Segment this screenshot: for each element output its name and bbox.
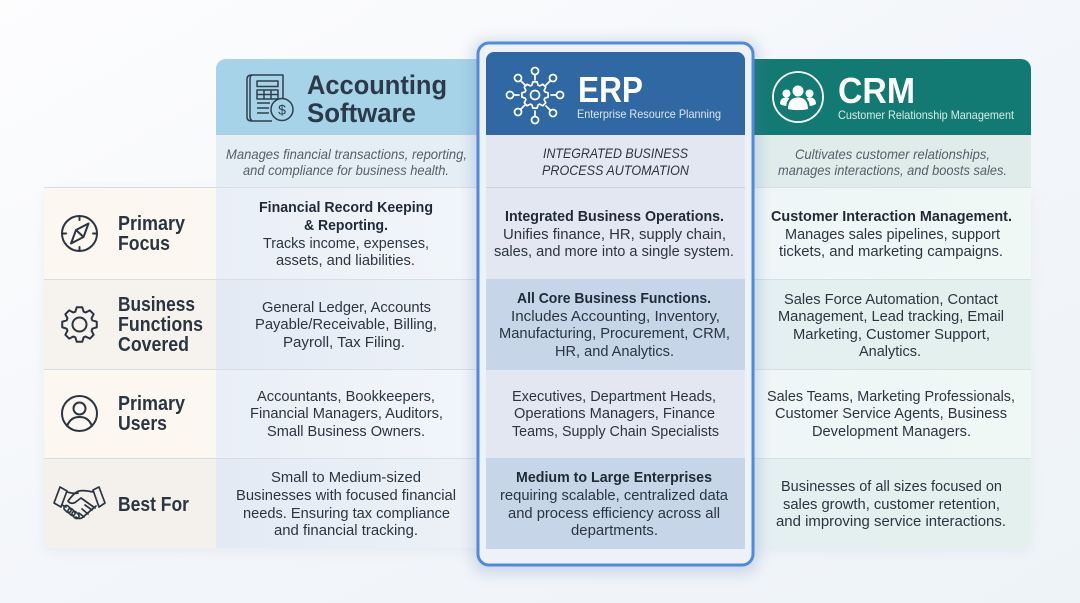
text: ERP primary users: Operations Managers, Finance	[514, 405, 715, 422]
label: Primary Focus	[118, 213, 186, 255]
text: CRM best for: sales growth, customer retention,	[783, 496, 1000, 513]
text: Accounting best for: needs. Ensuring tax compliance	[243, 505, 450, 522]
title: CRM: CRM	[838, 70, 915, 111]
icon: ledger with dollar	[247, 75, 293, 121]
title: ERP: ERP	[578, 69, 643, 110]
label: Business Functions Covered: Covered	[118, 334, 189, 356]
text: Accounting primary focus: & Reporting.	[304, 217, 388, 234]
text: Accounting description: Manages financial transactions, reporting,	[226, 146, 467, 162]
text: CRM primary focus: Manages sales pipelines, support	[785, 226, 1001, 243]
text: ERP description: PROCESS AUTOMATION	[542, 162, 690, 178]
text: Accounting primary focus	[259, 199, 433, 269]
text: CRM business functions: Marketing, Customer Support,	[793, 326, 990, 343]
subtitle: Customer Relationship Management: Customer Relationship Management	[838, 108, 1015, 122]
text: Accounting best for: and financial tracking.	[274, 522, 418, 539]
text: ERP business functions	[499, 290, 730, 360]
label: Primary Users	[118, 393, 186, 435]
text: Accounting primary users	[250, 388, 443, 440]
header: Accounting Software	[216, 59, 490, 135]
panel: row labels	[44, 187, 216, 548]
text: ERP description	[542, 145, 690, 178]
text: CRM description: Cultivates customer relationships,	[795, 146, 990, 162]
text: CRM best for	[776, 478, 1006, 530]
text: ERP best for: departments.	[571, 522, 658, 539]
text: CRM business functions: Management, Lead tracking, Email	[778, 308, 1004, 325]
text: Accounting business functions: General Ledger, Accounts	[262, 299, 431, 316]
text: Accounting primary focus: assets, and liabilities.	[276, 252, 415, 269]
subtitle: Enterprise Resource Planning: Enterprise Resource Planning	[577, 107, 721, 121]
text: Accounting business functions: Payroll, Tax Filing.	[283, 334, 405, 351]
header: Accounting Software: $	[278, 102, 286, 118]
text: ERP primary users: Executives, Department Heads,	[512, 388, 716, 405]
label: Business Functions Covered	[118, 294, 203, 356]
text: CRM description: manages interactions, and boosts sales.	[778, 162, 1007, 178]
label: Business Functions Covered: Functions	[118, 314, 203, 336]
text: ERP primary users	[512, 388, 719, 440]
text: Accounting primary users: Financial Managers, Auditors,	[250, 405, 443, 422]
title: Accounting Software: Accounting	[307, 70, 447, 100]
icon: user	[62, 396, 97, 431]
text: Accounting best for: Businesses with focused financial	[236, 487, 456, 504]
icon: compass	[62, 216, 97, 251]
header: ERP	[486, 52, 745, 135]
text: ERP best for: and process efficiency across all	[508, 505, 720, 522]
text: ERP best for: requiring scalable, centralized data	[500, 487, 729, 504]
text: Accounting description: and compliance for business health.	[243, 162, 449, 178]
label: Best For: Best For	[118, 494, 189, 516]
text: ERP primary users: Teams, Supply Chain Specialists	[512, 423, 719, 440]
label: Business Functions Covered: Business	[118, 294, 195, 316]
title: Accounting Software	[307, 70, 447, 128]
text: ERP description: INTEGRATED BUSINESS	[543, 145, 689, 161]
text: CRM best for: Businesses of all sizes focused on	[781, 478, 1002, 495]
text: CRM business functions	[778, 291, 1004, 360]
text: ERP business functions: HR, and Analytics.	[555, 343, 674, 360]
text: ERP business functions: Manufacturing, Procurement, CRM,	[499, 325, 730, 342]
text: Accounting primary focus: Tracks income, expenses,	[263, 235, 429, 252]
text: CRM primary focus: Customer Interaction Management.	[771, 208, 1012, 225]
label: Primary Users: Users	[118, 413, 167, 435]
text: Accounting best for: Small to Medium-sized	[271, 469, 421, 486]
text: Accounting description	[226, 146, 467, 178]
text: Accounting best for	[236, 469, 456, 539]
text: CRM business functions: Analytics.	[859, 343, 921, 360]
row dividers	[44, 188, 1031, 458]
text: Accounting business functions	[255, 299, 437, 351]
text: Accounting primary focus: Financial Record Keeping	[259, 199, 433, 216]
text: CRM description	[778, 146, 1007, 178]
icon: gear network	[506, 68, 564, 124]
header: CRM	[745, 59, 1031, 135]
text: CRM primary focus	[771, 208, 1012, 260]
text: CRM primary users: Customer Service Agents, Business	[775, 405, 1007, 422]
text: ERP primary focus: Unifies finance, HR, supply chain,	[503, 226, 726, 243]
label: Primary Focus: Focus	[118, 233, 170, 255]
text: ERP primary focus: Integrated Business Operations.	[505, 208, 724, 225]
title: Accounting Software: Software	[307, 98, 416, 128]
text: ERP primary focus	[494, 208, 734, 260]
text: ERP best for	[500, 469, 729, 539]
panel: CRM column	[745, 59, 1031, 548]
icon: handshake	[54, 487, 105, 520]
panel: ERP column	[478, 43, 753, 565]
text: ERP best for: Medium to Large Enterprises	[516, 469, 712, 486]
icon: gear	[62, 307, 97, 342]
text: CRM primary focus: tickets, and marketing campaigns.	[779, 243, 1003, 260]
label: Primary Focus: Primary	[118, 213, 186, 235]
text: CRM primary users	[767, 388, 1015, 440]
text: CRM business functions: Sales Force Automation, Contact	[784, 291, 999, 308]
text: Accounting primary users: Accountants, Bookkeepers,	[257, 388, 435, 405]
text: Accounting business functions: Payable/Receivable, Billing,	[255, 316, 437, 333]
text: Accounting primary users: Small Business Owners.	[267, 423, 425, 440]
text: ERP primary focus: sales, and more into a single system.	[494, 243, 734, 260]
label: Primary Users: Primary	[118, 393, 186, 415]
text: CRM primary users: Sales Teams, Marketing Professionals,	[767, 388, 1015, 405]
icon: customers	[773, 72, 823, 122]
panel: Accounting Software column	[216, 59, 490, 548]
text: CRM primary users: Development Managers.	[812, 423, 971, 440]
text: ERP business functions: Includes Accounting, Inventory,	[511, 308, 720, 325]
text: ERP business functions: All Core Business Functions.	[517, 290, 711, 307]
text: CRM best for: and improving service interactions.	[776, 513, 1006, 530]
